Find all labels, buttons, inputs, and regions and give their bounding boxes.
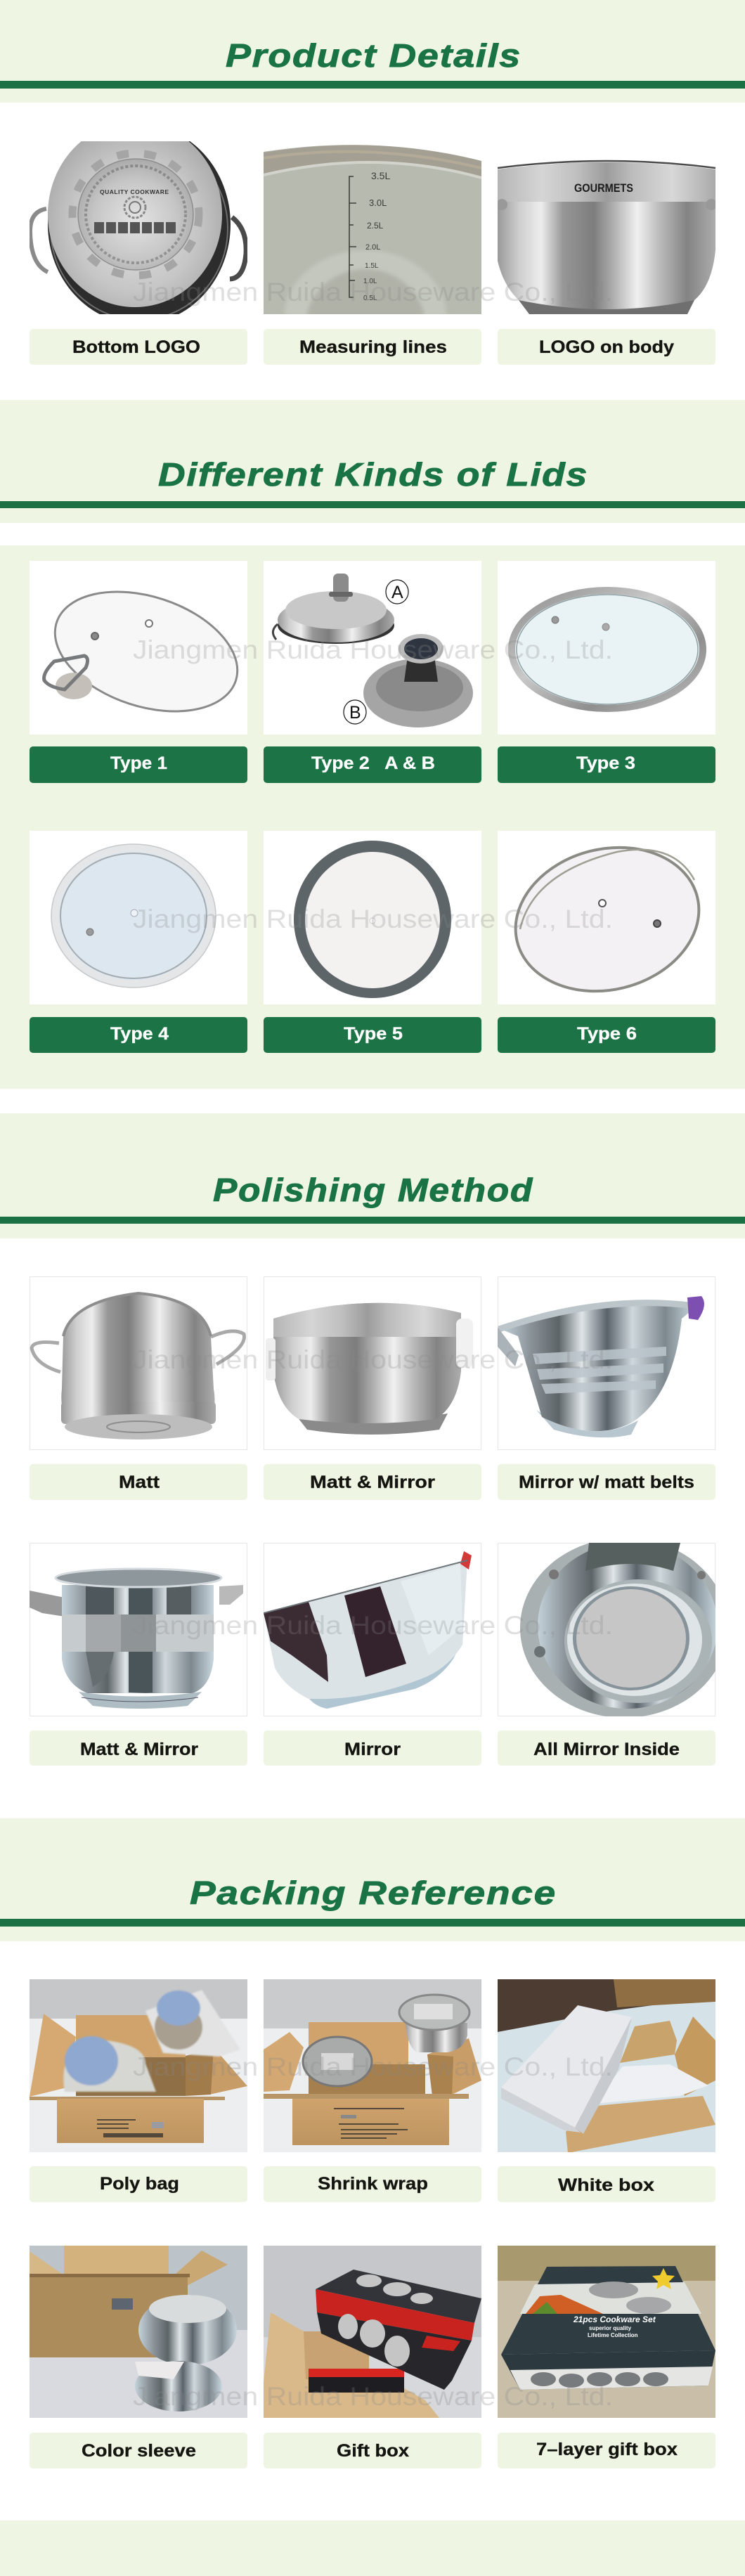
label: Matt <box>30 1464 247 1500</box>
watermark 3: Jiangmen Ruida Houseware Co., Ltd. <box>133 905 613 933</box>
label: All Mirror Inside <box>498 1730 715 1766</box>
label: LOGO on body: LOGO on body <box>539 337 674 357</box>
label: Matt & Mirror <box>264 1464 481 1500</box>
title: Different Kinds of Lids: Different Kinds of Lids <box>158 456 588 493</box>
photo: matt and mirror pot, row two <box>30 1543 247 1716</box>
label: Type 2 A & B <box>264 746 481 783</box>
label: Mirror: Mirror <box>344 1740 401 1759</box>
label: Type 5: Type 5 <box>344 1024 403 1044</box>
label: All Mirror Inside: All Mirror Inside <box>533 1740 680 1759</box>
photo: logo on body <box>498 160 715 314</box>
label: Mirror <box>264 1730 481 1766</box>
label: Mirror w/ matt belts: Mirror w/ matt belts <box>519 1473 694 1492</box>
title: Product Details: Product Details <box>226 37 522 74</box>
label: Type 4: Type 4 <box>110 1024 169 1044</box>
label: Matt & Mirror: Matt & Mirror <box>310 1473 435 1492</box>
photo: lid type 1 <box>30 561 247 734</box>
label: Shrink wrap: Shrink wrap <box>318 2174 428 2194</box>
photo: measuring lines: 3.5L <box>371 170 390 181</box>
photo: gift box <box>264 2246 481 2418</box>
bottom band <box>0 2520 745 2576</box>
photo: all mirror inside <box>498 1543 715 1716</box>
watermark 2: Jiangmen Ruida Houseware Co., Ltd. <box>133 635 613 664</box>
section header: Product Details <box>0 0 745 103</box>
photo: lid type 3 <box>498 561 715 734</box>
photo: 7-layer gift box: Lifetime Collection <box>588 2332 638 2338</box>
panel: lids background <box>0 545 745 1089</box>
label: Color sleeve <box>30 2433 247 2468</box>
label: Gift box <box>264 2433 481 2468</box>
photo: measuring lines: 1.5L <box>365 262 379 270</box>
label: Gift box: Gift box <box>337 2441 409 2461</box>
photo: white box <box>498 1979 715 2152</box>
label: Color sleeve: Color sleeve <box>82 2441 196 2461</box>
photo: matt and mirror pot <box>264 1276 481 1450</box>
photo: bottom logo <box>30 141 247 314</box>
photo: shrink wrap box <box>264 1979 481 2152</box>
label: 7-layer gift box <box>498 2433 715 2468</box>
photo: mirror pot with matt belts <box>498 1276 715 1450</box>
photo: measuring lines <box>264 145 481 314</box>
label: Type 1 <box>30 746 247 783</box>
label: White box <box>498 2166 715 2202</box>
photo: lid type 2 A and B <box>264 561 481 734</box>
photo: bottom logo: QUALITY COOKWARE <box>100 188 169 195</box>
section header: Different Kinds of Lids <box>0 400 745 523</box>
label: Mirror w/ matt belts <box>498 1464 715 1500</box>
photo: 7-layer gift box <box>498 2246 715 2418</box>
photo: lid type 5 <box>264 831 481 1004</box>
label: Type 6 <box>498 1017 715 1053</box>
photo: color sleeve <box>30 2246 247 2418</box>
section header: Packing Reference <box>0 1818 745 1941</box>
watermark 7: Jiangmen Ruida Houseware Co., Ltd. <box>133 2382 613 2411</box>
photo: 7-layer gift box: superior quality <box>589 2325 632 2331</box>
watermark 4: Jiangmen Ruida Houseware Co., Ltd. <box>133 1345 613 1374</box>
label: Poly bag <box>30 2166 247 2202</box>
title: Polishing Method: Polishing Method <box>213 1172 533 1208</box>
label: Matt: Matt <box>119 1473 160 1492</box>
photo: mirror pot <box>264 1543 481 1716</box>
label: Poly bag: Poly bag <box>100 2174 179 2194</box>
label: Matt & Mirror, row two <box>30 1730 247 1766</box>
label: Type 3 <box>498 746 715 783</box>
label: Measuring lines: Measuring lines <box>299 337 447 357</box>
watermark 5: Jiangmen Ruida Houseware Co., Ltd. <box>133 1611 613 1640</box>
photo: logo on body: GOURMETS <box>574 181 633 195</box>
label: Measuring lines <box>264 329 481 365</box>
photo: matt pot <box>30 1276 247 1450</box>
label: Type 4 <box>30 1017 247 1053</box>
photo: 7-layer gift box: 21pcs Cookware Set <box>573 2315 656 2324</box>
photo: lid type 4 <box>30 831 247 1004</box>
label: Type 1: Type 1 <box>110 753 167 773</box>
photo: measuring lines: 2.0L <box>365 243 380 252</box>
label: LOGO on body <box>498 329 715 365</box>
label: Matt & Mirror, row two: Matt & Mirror <box>80 1740 198 1759</box>
watermark 1: Jiangmen Ruida Houseware Co., Ltd. <box>133 278 613 306</box>
photo: lid type 2 A and B: A <box>391 583 403 602</box>
label: Bottom LOGO: Bottom LOGO <box>72 337 200 357</box>
label: White box: White box <box>558 2175 654 2195</box>
photo: measuring lines: 3.0L <box>369 198 387 208</box>
title: Packing Reference: Packing Reference <box>190 1875 557 1911</box>
label: Bottom LOGO <box>30 329 247 365</box>
watermark 6: Jiangmen Ruida Houseware Co., Ltd. <box>133 2052 613 2081</box>
label: Type 2 A & B: Type 2 A & B <box>311 753 435 773</box>
label: Type 5 <box>264 1017 481 1053</box>
photo: lid type 6 <box>498 831 715 1004</box>
photo: poly bag box <box>30 1979 247 2152</box>
photo: measuring lines: 2.5L <box>367 221 384 231</box>
photo: measuring lines: 1.0L <box>363 278 377 285</box>
label: Type 6: Type 6 <box>577 1024 637 1044</box>
label: Type 3: Type 3 <box>576 753 635 773</box>
photo: measuring lines: 0.5L <box>363 295 377 302</box>
section header: Polishing Method <box>0 1113 745 1238</box>
photo: lid type 2 A and B: B <box>349 703 361 723</box>
label: 7-layer gift box: 7–layer gift box <box>536 2440 678 2459</box>
label: Shrink wrap <box>264 2166 481 2202</box>
